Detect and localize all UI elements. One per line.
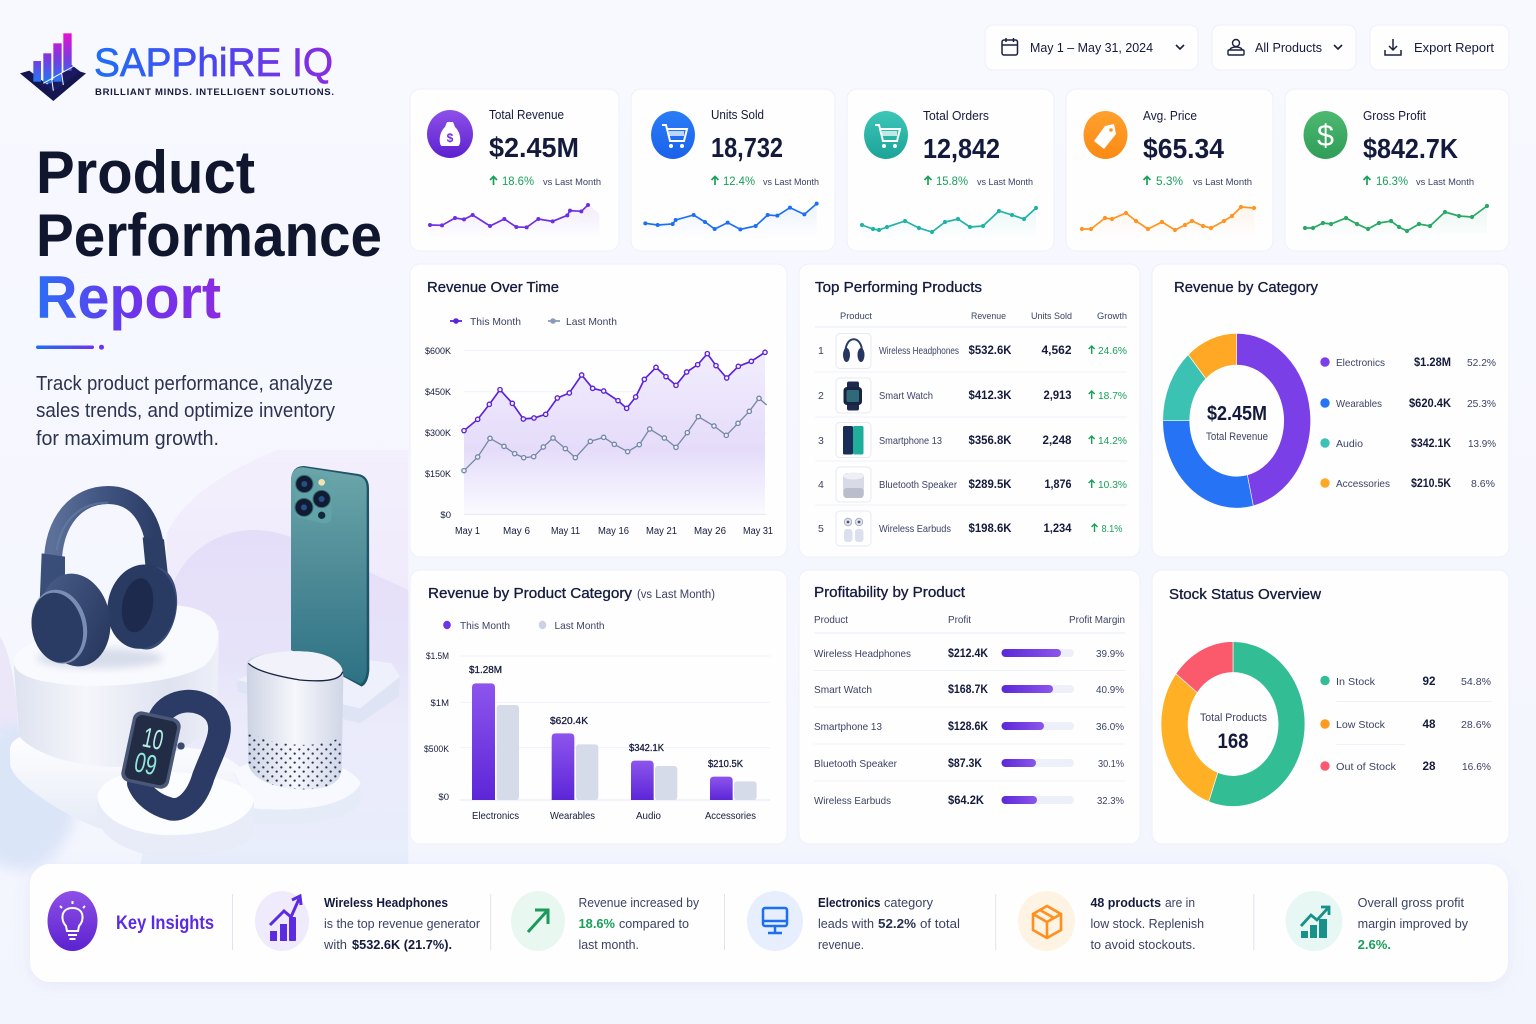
intro paragraph: for maximum growth. bbox=[36, 428, 219, 450]
legend: $1.28M bbox=[1414, 357, 1451, 369]
arrow: up bbox=[1092, 524, 1098, 532]
icon: teal cart bbox=[864, 111, 908, 159]
KPI card: total orders: vs Last Month bbox=[977, 177, 1033, 188]
row: headphones: 39.9% bbox=[1096, 648, 1124, 660]
arrow: up bbox=[1089, 346, 1095, 354]
row 2: Smart Watch bbox=[879, 390, 933, 402]
panel: revenue by product category bbox=[410, 570, 787, 844]
legend: 54.8% bbox=[1461, 676, 1491, 688]
y axis labels bbox=[425, 346, 452, 521]
row: smartphone: 36.0% bbox=[1096, 721, 1124, 733]
title: Product bbox=[36, 139, 255, 206]
row: smartphone: Smartphone 13 bbox=[814, 721, 882, 733]
x axis labels: May 21 bbox=[646, 526, 677, 537]
category labels: Accessories bbox=[705, 810, 756, 822]
KPI card: total revenue bbox=[410, 89, 619, 251]
legend: In Stock bbox=[1336, 676, 1376, 688]
row: speaker: $87.3K bbox=[948, 758, 983, 770]
row: earbuds: $64.2K bbox=[948, 795, 985, 807]
y axis labels bbox=[424, 651, 450, 803]
panel: key insights bbox=[30, 864, 1508, 982]
heading: Stock Status Overview bbox=[1169, 587, 1322, 603]
category labels bbox=[472, 810, 756, 822]
title underline bbox=[36, 345, 104, 350]
legend: 92 bbox=[1422, 676, 1436, 688]
legend: Last Month bbox=[566, 316, 617, 328]
arrow: up bbox=[1144, 176, 1150, 185]
KPI card: total revenue: 18.6% bbox=[502, 174, 534, 188]
KPI card: total orders: Total Orders bbox=[923, 109, 989, 123]
bar value labels: $342.1K bbox=[629, 742, 664, 754]
insight: low stock: 48 products bbox=[1090, 896, 1161, 910]
row 5: 1,234 bbox=[1044, 521, 1072, 535]
headphones bbox=[25, 495, 183, 672]
y axis labels: $1M bbox=[431, 698, 449, 709]
row 1: $532.6K bbox=[968, 343, 1012, 357]
arrow: up bbox=[490, 176, 497, 185]
insight: low stock: to avoid stockouts. bbox=[1090, 938, 1196, 952]
KPI card: total revenue: Total Revenue bbox=[489, 108, 564, 122]
row 5: Wireless Earbuds bbox=[879, 523, 951, 535]
table header: Growth bbox=[1097, 311, 1127, 322]
legend: This Month bbox=[460, 620, 510, 632]
x axis labels: May 16 bbox=[598, 526, 629, 537]
insight: electronics lead: category bbox=[884, 896, 934, 910]
arrow: up bbox=[712, 176, 718, 185]
row: smart watch: Smart Watch bbox=[814, 684, 872, 696]
row: headphones bbox=[814, 648, 1124, 660]
row 3 bbox=[818, 422, 1127, 458]
legend bbox=[1320, 357, 1496, 490]
donut centre value bbox=[1206, 403, 1268, 443]
title bbox=[36, 139, 382, 331]
icon: price tag bbox=[1084, 111, 1128, 159]
smart watch bbox=[120, 701, 220, 809]
KPI card: units sold: vs Last Month bbox=[763, 177, 819, 188]
KPI card: average price: 5.3% bbox=[1156, 174, 1183, 188]
donut centre value: 168 bbox=[1218, 730, 1249, 753]
logo wordmark: SAPPhiRE IQ bbox=[94, 41, 333, 85]
icon: money bag bbox=[427, 110, 473, 158]
panel: top performing products bbox=[799, 264, 1140, 557]
insight: electronics lead bbox=[747, 891, 960, 952]
row 1: Wireless Headphones bbox=[879, 345, 959, 357]
KPI card: average price: vs Last Month bbox=[1193, 177, 1252, 188]
row 3: Smartphone 13 bbox=[879, 435, 942, 447]
icon: box bbox=[1018, 891, 1075, 951]
insight: top product: Wireless Headphones bbox=[324, 896, 448, 910]
KPI card: gross profit bbox=[1285, 89, 1509, 251]
insight: low stock: low stock. Replenish bbox=[1090, 917, 1204, 931]
x axis labels: May 26 bbox=[694, 526, 726, 537]
row 2: 2,913 bbox=[1044, 388, 1072, 402]
KPI card: units sold: Units Sold bbox=[711, 108, 764, 122]
icon: teal growth bbox=[1286, 891, 1342, 951]
KPI card: total orders: 15.8% bbox=[936, 174, 968, 188]
row: smart watch: 40.9% bbox=[1096, 684, 1124, 696]
KPI card: total orders: 12,842 bbox=[923, 133, 1000, 164]
title: Report bbox=[36, 264, 221, 331]
icon: dollar: $ bbox=[1317, 118, 1334, 153]
bar chart bbox=[460, 656, 770, 800]
insight: electronics lead: revenue. bbox=[818, 938, 864, 952]
icon: dollar bbox=[1304, 111, 1348, 159]
icon: growth bars bbox=[255, 891, 309, 951]
y axis labels: $600K bbox=[425, 346, 452, 357]
legend: 16.6% bbox=[1462, 761, 1491, 773]
row: speaker: Bluetooth Speaker bbox=[814, 758, 897, 770]
row 4: 1,876 bbox=[1044, 477, 1072, 491]
table header: Profit Margin bbox=[1069, 615, 1125, 626]
date range button bbox=[985, 25, 1198, 70]
row 4 bbox=[818, 467, 1127, 502]
donut chart bbox=[1161, 641, 1305, 807]
y axis labels: $0 bbox=[440, 510, 451, 521]
KPI card: total revenue: vs Last Month bbox=[543, 177, 601, 188]
row 4: 10.3% bbox=[1098, 479, 1127, 491]
row 5: 5 bbox=[818, 523, 824, 535]
table header bbox=[814, 615, 1125, 781]
table header bbox=[815, 311, 1127, 505]
legend: $342.1K bbox=[1411, 438, 1452, 450]
panel: revenue by category bbox=[1152, 264, 1509, 557]
icon: headphones bbox=[843, 339, 864, 362]
bar value labels: $1.28M bbox=[469, 664, 502, 676]
arrow: up bbox=[1089, 436, 1095, 444]
insight: gross margin bbox=[1286, 891, 1469, 952]
intro paragraph bbox=[36, 373, 335, 450]
panel: profitability by product bbox=[799, 570, 1140, 844]
insight: electronics lead: 52.2% bbox=[878, 917, 916, 931]
watch time: 10 bbox=[140, 722, 166, 756]
insight: top product: $532.6K (21.7%). bbox=[352, 938, 452, 952]
bar value labels: $210.5K bbox=[708, 758, 743, 770]
legend: Last Month bbox=[554, 620, 605, 632]
icon: up arrow bbox=[511, 891, 565, 951]
heading: Key Insights bbox=[116, 913, 214, 934]
insight: top product: is the top revenue generator bbox=[324, 917, 480, 931]
product filter button bbox=[1212, 25, 1356, 70]
row 2: 2 bbox=[818, 390, 824, 402]
logo mark: rising bars on layered base bbox=[20, 33, 86, 101]
sparkline bbox=[862, 208, 1036, 238]
KPI card: units sold: 18,732 bbox=[711, 132, 783, 163]
legend: This Month bbox=[470, 316, 521, 328]
row 3: 2,248 bbox=[1042, 433, 1072, 447]
icon: monitor bbox=[747, 891, 803, 951]
row: headphones: $212.4K bbox=[948, 648, 989, 660]
insight: low stock bbox=[1018, 891, 1204, 952]
x axis labels: May 1 bbox=[455, 526, 480, 537]
insight: gross margin: margin improved by bbox=[1358, 917, 1469, 931]
y axis labels: $500K bbox=[424, 744, 450, 755]
legend: Electronics bbox=[1336, 357, 1385, 369]
product filter button: All Products bbox=[1255, 41, 1322, 55]
icon: calendar bbox=[1002, 38, 1018, 55]
y axis labels: $0 bbox=[438, 792, 449, 803]
row 1: 4,562 bbox=[1042, 343, 1072, 357]
sparkline bbox=[1082, 207, 1254, 238]
line chart bbox=[464, 350, 767, 514]
donut centre value: $2.45M bbox=[1207, 403, 1267, 425]
y axis labels: $1.5M bbox=[426, 651, 449, 662]
insight: revenue increase: Revenue increased by bbox=[578, 896, 700, 910]
illustration: product showcase on podiums bbox=[0, 450, 408, 870]
x axis labels: May 6 bbox=[503, 526, 530, 537]
heading: Profitability by Product bbox=[814, 585, 965, 601]
icon: earbuds bbox=[844, 518, 864, 542]
heading: Top Performing Products bbox=[815, 280, 982, 296]
legend bbox=[450, 316, 617, 328]
row 1: 24.6% bbox=[1098, 345, 1127, 357]
category labels: Audio bbox=[636, 810, 661, 822]
donut centre value bbox=[1200, 712, 1267, 753]
export button: Export Report bbox=[1414, 41, 1495, 55]
row 3: $356.8K bbox=[968, 433, 1012, 447]
heading: Revenue Over Time bbox=[427, 280, 559, 296]
insight: top product bbox=[255, 891, 480, 952]
legend: Wearables bbox=[1336, 398, 1382, 410]
insight: revenue increase: last month. bbox=[578, 938, 639, 952]
legend: 25.3% bbox=[1467, 398, 1496, 410]
legend: Audio bbox=[1336, 438, 1363, 450]
KPI card: gross profit: vs Last Month bbox=[1416, 177, 1474, 188]
phone bbox=[291, 466, 369, 687]
row: earbuds: Wireless Earbuds bbox=[814, 795, 891, 807]
KPI card: average price: Avg. Price bbox=[1143, 109, 1197, 123]
row: speaker: 30.1% bbox=[1098, 758, 1124, 770]
legend: Accessories bbox=[1336, 478, 1390, 490]
smart speaker bbox=[247, 651, 343, 789]
logo bbox=[20, 33, 334, 101]
row 4: 4 bbox=[818, 479, 824, 491]
category labels: Electronics bbox=[472, 810, 519, 822]
legend bbox=[1320, 676, 1492, 773]
phone stand bbox=[237, 650, 400, 723]
row 2 bbox=[818, 378, 1127, 413]
row 3: 14.2% bbox=[1098, 435, 1127, 447]
KPI card: gross profit: 16.3% bbox=[1376, 174, 1408, 188]
row 4: $289.5K bbox=[968, 477, 1012, 491]
row: speaker bbox=[814, 758, 1124, 770]
heading: Revenue by Product Category bbox=[428, 586, 633, 602]
legend: 48 bbox=[1422, 719, 1436, 731]
sparkline bbox=[1305, 206, 1487, 238]
arrow: up bbox=[1089, 480, 1095, 488]
bar value labels bbox=[469, 664, 743, 770]
icon: light bulb bbox=[48, 891, 98, 951]
KPI card: units sold: 12.4% bbox=[723, 174, 755, 188]
arrow: up bbox=[1364, 176, 1370, 185]
insight: gross margin: Overall gross profit bbox=[1358, 896, 1465, 910]
legend: Low Stock bbox=[1336, 719, 1386, 731]
x axis labels: May 31 bbox=[743, 526, 773, 537]
x axis labels bbox=[455, 526, 773, 537]
row 3: 3 bbox=[818, 435, 824, 447]
table header: Units Sold bbox=[1031, 311, 1072, 322]
y axis labels: $300K bbox=[425, 428, 452, 439]
legend: 28 bbox=[1422, 761, 1436, 773]
row 2: $412.3K bbox=[968, 388, 1012, 402]
watch podium plate bbox=[97, 771, 254, 857]
donut chart bbox=[1163, 333, 1311, 508]
panel: revenue over time bbox=[410, 264, 787, 557]
insight: top product: with bbox=[323, 938, 347, 952]
heading: Revenue by Category bbox=[1174, 280, 1319, 296]
date range button: May 1 – May 31, 2024 bbox=[1030, 41, 1153, 55]
large cylinder podium bbox=[13, 605, 219, 767]
icon: shopping cart bbox=[651, 111, 695, 159]
legend: 8.6% bbox=[1471, 478, 1495, 490]
row: smart watch: $168.7K bbox=[948, 684, 989, 696]
export button bbox=[1370, 25, 1509, 70]
legend: Out of Stock bbox=[1336, 761, 1397, 773]
smart watch: 09 bbox=[132, 746, 160, 781]
table header: Product bbox=[840, 311, 872, 322]
title: Performance bbox=[36, 202, 382, 269]
insight: revenue increase bbox=[511, 891, 700, 952]
row 5: $198.6K bbox=[968, 521, 1012, 535]
row 5: 8.1% bbox=[1102, 523, 1122, 535]
legend: 13.9% bbox=[1468, 438, 1496, 450]
y axis labels: $450K bbox=[425, 387, 452, 398]
legend: $210.5K bbox=[1411, 478, 1452, 490]
logo tagline: BRILLIANT MINDS. INTELLIGENT SOLUTIONS. bbox=[95, 87, 334, 98]
arrow: up bbox=[1089, 391, 1095, 399]
table header: Profit bbox=[948, 615, 971, 626]
KPI card: units sold bbox=[631, 89, 835, 251]
insight: gross margin: 2.6%. bbox=[1358, 938, 1391, 952]
legend bbox=[443, 620, 605, 632]
intro paragraph: Track product performance, analyze bbox=[36, 373, 333, 395]
KPI card: average price: $65.34 bbox=[1143, 133, 1224, 164]
insight: revenue increase: 18.6% bbox=[578, 917, 615, 931]
icon: money bag: $ bbox=[447, 131, 454, 145]
category labels: Wearables bbox=[550, 810, 595, 822]
row: earbuds bbox=[814, 795, 1124, 807]
row: smartphone: $128.6K bbox=[948, 721, 989, 733]
sparkline bbox=[643, 202, 819, 238]
x axis labels: May 11 bbox=[551, 526, 580, 537]
row: earbuds: 32.3% bbox=[1097, 795, 1124, 807]
panel: revenue by product category: (vs Last Month) bbox=[637, 589, 715, 601]
row 4: Bluetooth Speaker bbox=[879, 479, 957, 491]
table header: Product bbox=[814, 615, 848, 626]
KPI card: total revenue: $2.45M bbox=[489, 132, 579, 163]
row: smart watch bbox=[814, 684, 1124, 696]
intro paragraph: sales trends, and optimize inventory bbox=[36, 400, 335, 422]
podium plates bbox=[10, 733, 361, 828]
legend: 28.6% bbox=[1461, 719, 1491, 731]
row: smartphone bbox=[814, 721, 1124, 733]
donut centre value: Total Products bbox=[1200, 712, 1267, 724]
icon: product group bbox=[1228, 40, 1244, 55]
KPI card: gross profit: Gross Profit bbox=[1363, 109, 1426, 123]
row 2: 18.7% bbox=[1098, 390, 1127, 402]
icon: watch bbox=[844, 382, 862, 410]
legend: $620.4K bbox=[1409, 398, 1452, 410]
insight: electronics lead: leads with bbox=[818, 917, 874, 931]
sparkline bbox=[428, 203, 599, 238]
icon: download bbox=[1385, 39, 1401, 55]
insight: revenue increase: compared to bbox=[619, 917, 689, 931]
row 1 bbox=[818, 334, 1127, 368]
KPI card: total orders bbox=[847, 89, 1054, 251]
icon: phones bbox=[843, 426, 864, 454]
row: headphones: Wireless Headphones bbox=[814, 648, 911, 660]
bar value labels: $620.4K bbox=[550, 715, 588, 727]
insight: electronics lead: of total bbox=[920, 917, 960, 931]
legend: 52.2% bbox=[1467, 357, 1496, 369]
y axis labels: $150K bbox=[425, 469, 452, 480]
KPI card: gross profit: $842.7K bbox=[1363, 133, 1458, 164]
insight: low stock: are in bbox=[1165, 896, 1195, 910]
donut centre value: Total Revenue bbox=[1206, 431, 1268, 443]
KPI card: average price bbox=[1066, 89, 1273, 251]
icon: speaker bbox=[843, 472, 864, 498]
panel: stock status overview bbox=[1152, 570, 1509, 844]
table header: Revenue bbox=[971, 311, 1006, 322]
insight: electronics lead: Electronics bbox=[818, 896, 881, 910]
arrow: up bbox=[924, 176, 932, 185]
row 5 bbox=[818, 511, 1122, 546]
row 1: 1 bbox=[818, 345, 824, 357]
